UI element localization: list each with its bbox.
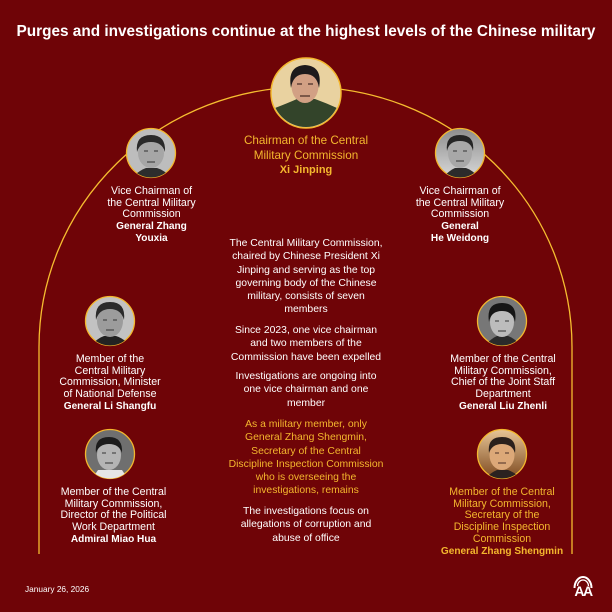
central text: ongoing investigations: one vice chairman and one (244, 384, 368, 395)
central text: ongoing investigations (236, 371, 376, 409)
portrait: He Weidong (436, 128, 484, 178)
central text: composition: governing body of the Chinese (236, 278, 376, 289)
central text: Zhang Shengmin highlight: who is overseeing the (256, 472, 356, 483)
central text: ongoing investigations: Investigations are ongoing into (236, 371, 376, 382)
date: January 26, 2026 (25, 584, 89, 594)
central text: ongoing investigations: member (287, 398, 325, 409)
central text: Zhang Shengmin highlight (229, 419, 383, 496)
central text: expulsions: and two members of the (250, 338, 362, 349)
label: Zhang Youxia: Commission (122, 208, 181, 220)
label: Liu Zhenli: General Liu Zhenli (459, 401, 547, 412)
label: Zhang Youxia: the Central Military (107, 197, 196, 209)
label: Zhang Youxia: Youxia (135, 233, 168, 244)
icon: AA logo: AA (574, 583, 593, 599)
label: Zhang Youxia: General Zhang (116, 221, 187, 232)
label: Miao Hua (61, 486, 166, 545)
portrait: Xi Jinping (271, 58, 341, 130)
label: Xi Jinping: Chairman of the Central (244, 134, 368, 147)
title: Purges and investigations continue at the highest levels of the Chinese military (17, 23, 595, 40)
label: He Weidong: He Weidong (431, 233, 489, 244)
label: Miao Hua: Member of the Central (61, 486, 166, 498)
central text: allegations (241, 506, 371, 544)
central text: composition: military, consists of seven (247, 291, 365, 302)
label: Liu Zhenli: Military Commission, (454, 365, 552, 377)
central text: expulsions: Commission have been expelled (231, 352, 381, 363)
portrait: Zhang Youxia (126, 128, 176, 178)
label: Miao Hua: Military Commission, (65, 498, 162, 510)
label: Zhang Shengmin: Member of the Central (449, 486, 555, 498)
central text: Zhang Shengmin highlight: Secretary of the Central (251, 446, 361, 457)
label: Zhang Shengmin: Military Commission, (453, 498, 551, 510)
label: He Weidong: Vice Chairman of (419, 185, 501, 197)
label: Li Shangfu: Central Military (75, 365, 145, 377)
label: Liu Zhenli: Member of the Central (450, 353, 556, 365)
label: Li Shangfu: Commission, Minister (59, 376, 161, 388)
label: Liu Zhenli: Department (475, 388, 531, 400)
portraits (84, 57, 528, 480)
central text: Zhang Shengmin highlight: investigations, remains (253, 485, 359, 496)
central text: expulsions (231, 325, 381, 363)
central text: Zhang Shengmin highlight: As a military member, only (245, 419, 367, 430)
label: Zhang Youxia (107, 185, 196, 244)
portrait: Miao Hua (86, 430, 134, 479)
central text: Zhang Shengmin highlight: Discipline Inspection Commission (229, 459, 383, 470)
central text: composition: The Central Military Commission, (229, 238, 383, 249)
central text: Zhang Shengmin highlight: General Zhang Shengmin, (245, 432, 367, 443)
label: Zhang Shengmin: Commission (473, 533, 531, 545)
label: He Weidong: the Central Military (416, 197, 504, 209)
portrait: Liu Zhenli (478, 296, 526, 346)
central text: composition: Jinping and serving as the top (237, 265, 375, 276)
label: He Weidong: General (441, 221, 479, 232)
portrait: Li Shangfu (86, 296, 134, 346)
label: Xi Jinping (244, 134, 368, 176)
label: Zhang Shengmin (441, 486, 563, 557)
label: Li Shangfu (59, 353, 161, 412)
central text: composition (229, 238, 383, 315)
label: Liu Zhenli (450, 353, 556, 412)
central text: composition: members (284, 304, 328, 315)
label: Zhang Shengmin: General Zhang Shengmin (441, 546, 563, 557)
label: Zhang Youxia: Vice Chairman of (111, 185, 192, 197)
label: Miao Hua: Director of the Political (61, 509, 166, 521)
label: Miao Hua: Admiral Miao Hua (71, 534, 156, 545)
central text: allegations: abuse of office (272, 533, 340, 544)
label: Xi Jinping: Xi Jinping (280, 164, 332, 176)
central text: expulsions: Since 2023, one vice chairman (235, 325, 377, 336)
central text: allegations: allegations of corruption and (241, 519, 371, 530)
label: Li Shangfu: General Li Shangfu (64, 401, 156, 412)
central text: composition: chaired by Chinese President Xi (232, 251, 380, 262)
label: He Weidong (416, 185, 504, 244)
portrait: Zhang Shengmin (478, 430, 526, 479)
central text: allegations: The investigations focus on (243, 506, 369, 517)
label: Li Shangfu: Member of the (76, 353, 144, 365)
label: Zhang Shengmin: Secretary of the (465, 509, 539, 521)
label: Xi Jinping: Military Commission (254, 149, 358, 162)
label: Zhang Shengmin: Discipline Inspection (454, 521, 550, 533)
label: Liu Zhenli: Chief of the Joint Staff (451, 376, 555, 388)
label: Miao Hua: Work Department (72, 521, 155, 533)
label: Li Shangfu: of National Defense (63, 388, 157, 400)
label: He Weidong: Commission (431, 208, 489, 220)
